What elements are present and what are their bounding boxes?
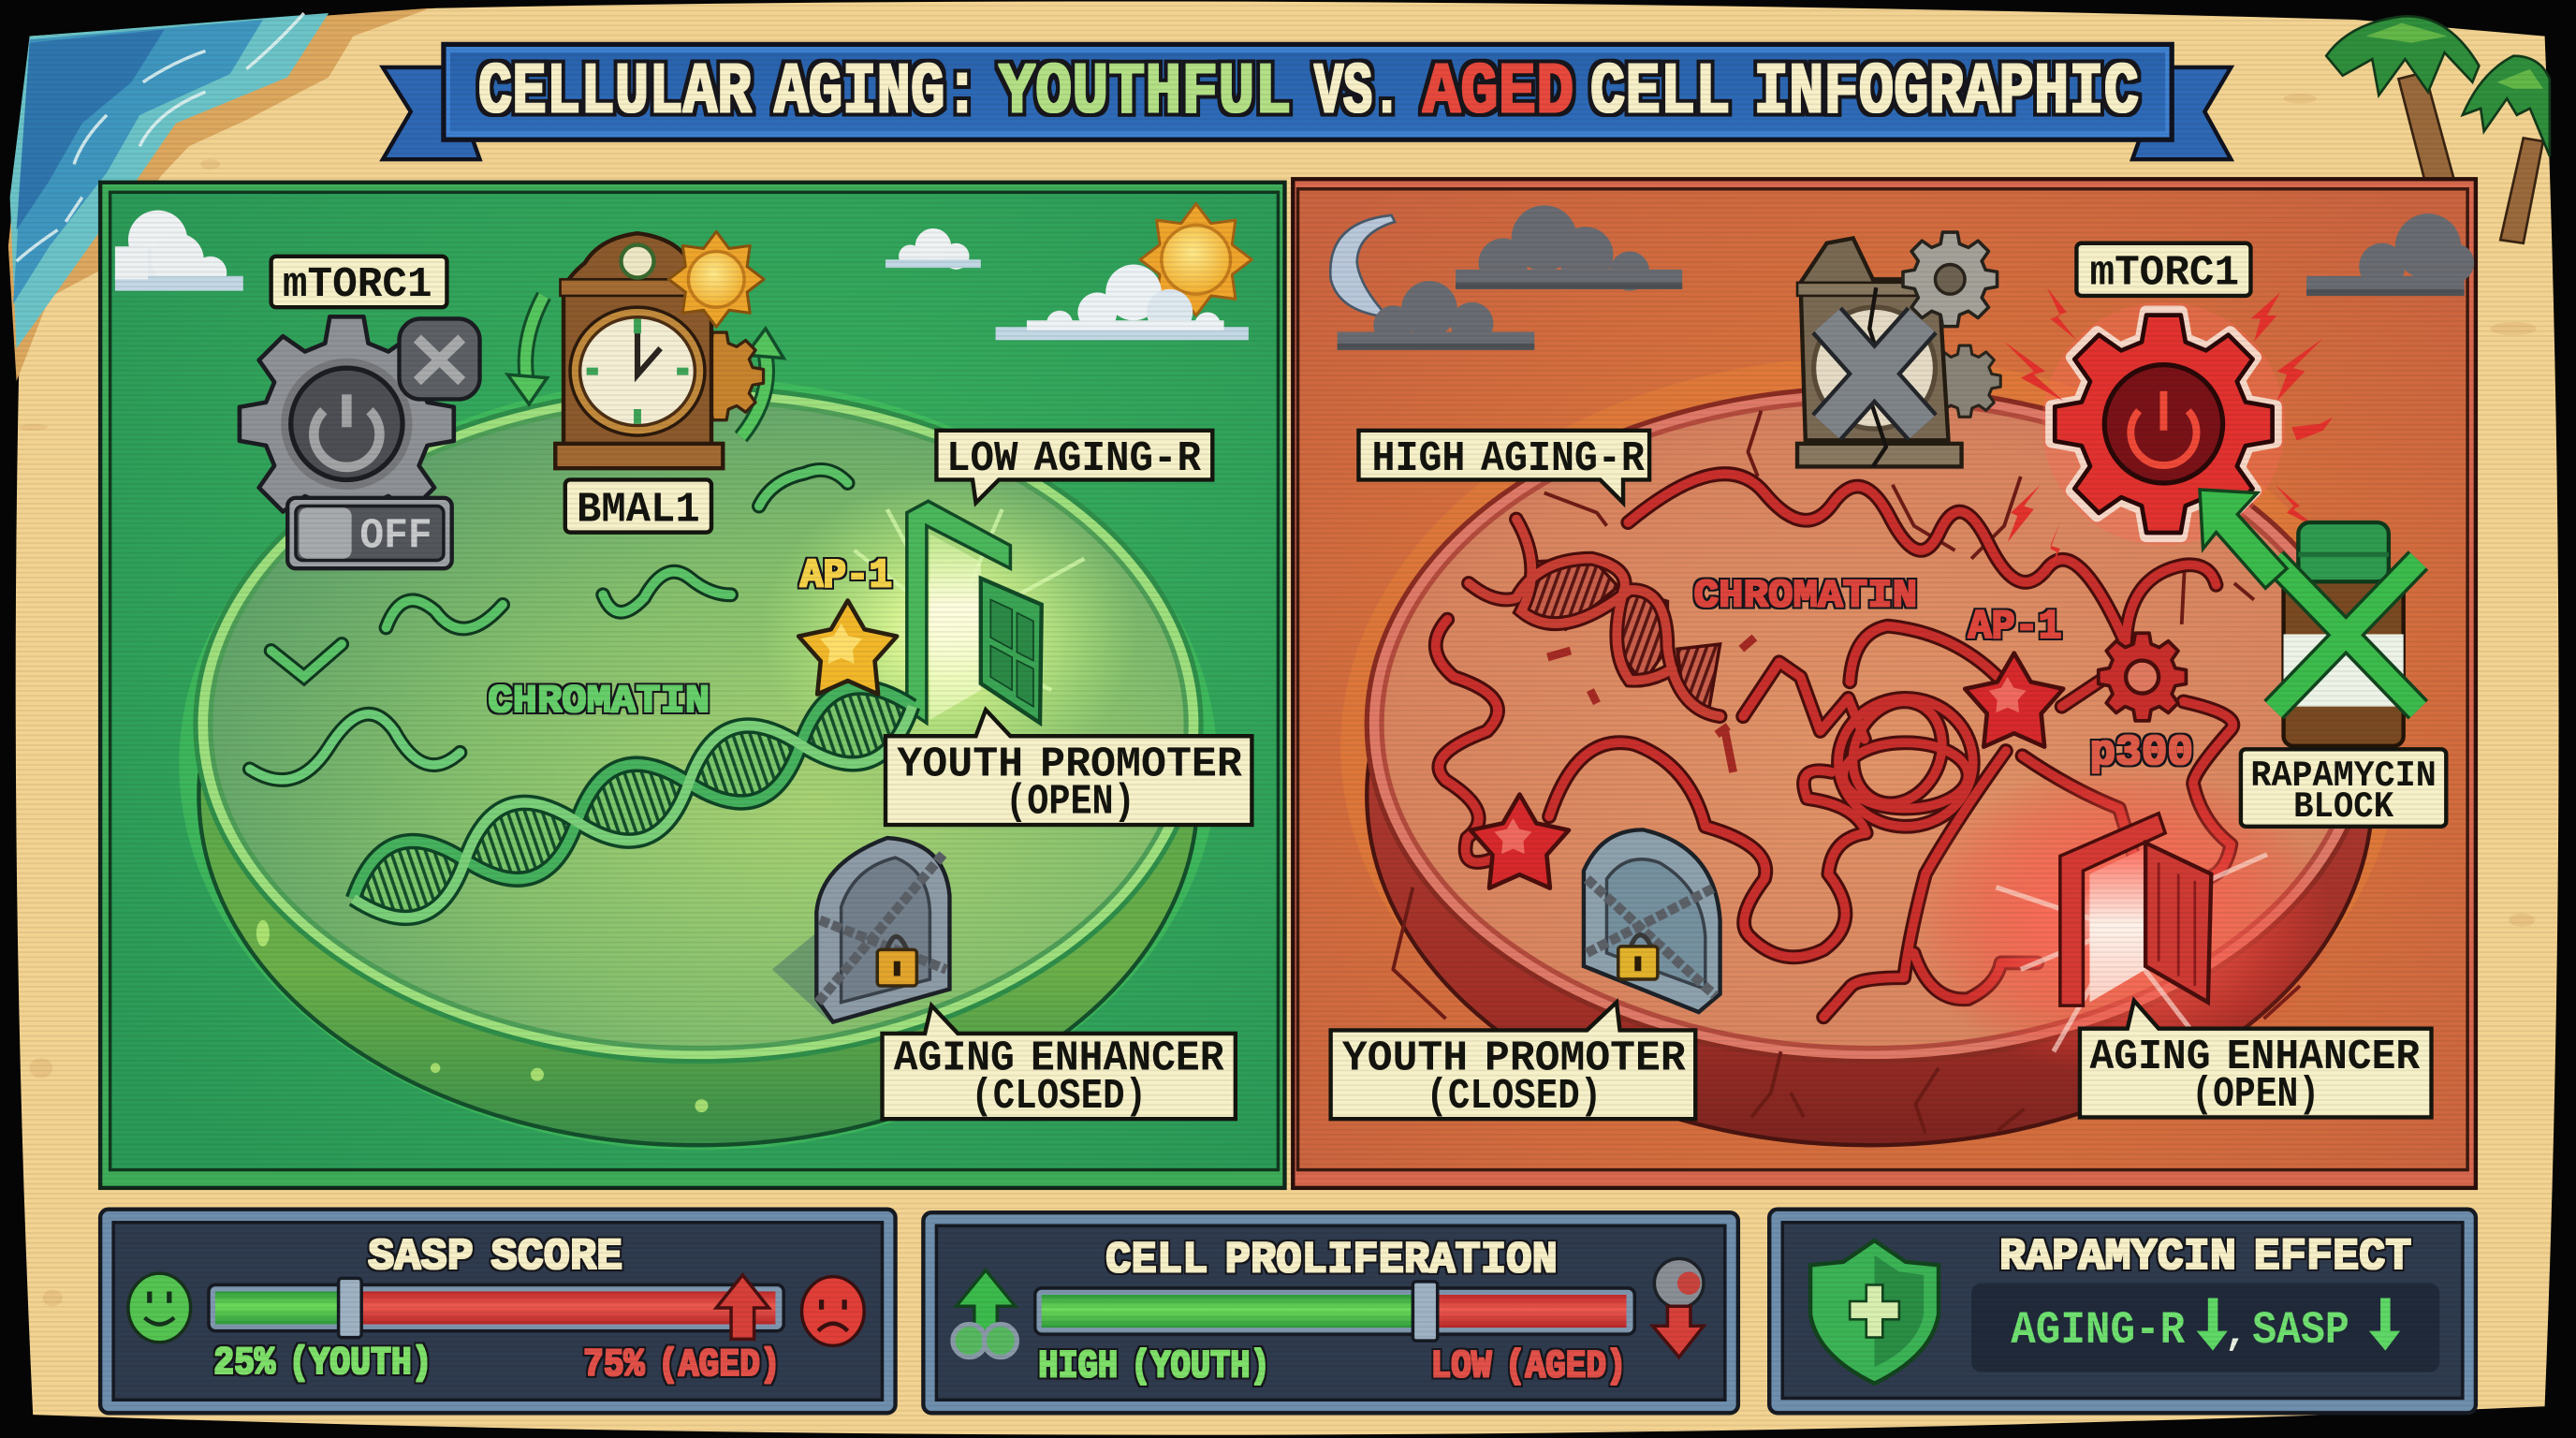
panel: rapamycin effect: [1769, 1210, 2476, 1413]
green inhibition arrow: [2200, 490, 2287, 588]
youth value: 25% (YOUTH): [213, 1341, 432, 1386]
label: rapamycin block: [2241, 749, 2446, 828]
red star AP-1: [1965, 653, 2063, 747]
ribbon tail right: [2132, 67, 2231, 159]
clock arrows: [507, 296, 783, 437]
X badge: [400, 318, 480, 399]
arrow down 1: [2197, 1298, 2228, 1351]
dish rim: [196, 388, 1201, 1062]
dish surface: [211, 401, 1186, 1049]
p300 gear: [2099, 633, 2186, 721]
clock: BMAL1: [555, 233, 764, 468]
AP-1 label: AP-1: [1969, 604, 2062, 651]
icon: smiley: [128, 1273, 191, 1343]
toggle off: [287, 498, 452, 568]
chromatin label: CHROMATIN: [1693, 574, 1917, 619]
label: mTORC1 on: mTORC1: [2089, 249, 2239, 298]
frame: [100, 1210, 896, 1413]
sun right: [1140, 204, 1251, 315]
title text vs: VS.: [1314, 52, 1401, 134]
label: low aging-r: LOW AGING-R: [946, 434, 1202, 483]
lightning bolts: [2004, 287, 2333, 579]
panel: cell proliferation: [923, 1212, 1738, 1413]
low label: LOW (AGED): [1431, 1344, 1627, 1389]
panel frame: [1293, 179, 2476, 1188]
broken gear: [1903, 232, 1998, 327]
panel: youthful cell: [100, 183, 1284, 1188]
chromatin squiggles: [250, 470, 848, 780]
gauge bar: [209, 1278, 783, 1338]
moon: [1330, 215, 1395, 317]
outer glow: [1340, 357, 2398, 1138]
label: aging enhancer closed: AGING ENHANCER: [894, 1034, 1224, 1083]
open door: youth promoter: [761, 477, 1138, 788]
open door: aging enhancer: [1906, 764, 2333, 1077]
dark cloud 3: [2306, 213, 2474, 296]
locked gate: youth promoter: [1584, 829, 1720, 1012]
label: aging enhancer open: AGING ENHANCER: [2089, 1033, 2421, 1081]
inner: [936, 1225, 1725, 1400]
label: youth promoter open: (OPEN): [1005, 778, 1135, 827]
title banner: [383, 44, 2231, 159]
label: high aging-r: [1358, 431, 1649, 503]
label: aging enhancer closed: (CLOSED): [971, 1072, 1147, 1121]
green X block: [2274, 560, 2418, 710]
chromatin label: CHROMATIN: [488, 679, 710, 724]
p300 label: p300: [2089, 728, 2193, 777]
panel frame: [100, 183, 1284, 1188]
label: youth promoter open: YOUTH PROMOTER: [897, 740, 1242, 788]
banner inner: [450, 52, 2165, 131]
tangled chromatin: [1436, 620, 2232, 1017]
red star lower: [1471, 795, 1569, 888]
inner: [1782, 1223, 2463, 1399]
label: aging enhancer open: (OPEN): [2191, 1070, 2320, 1119]
gray X: [1827, 320, 1922, 427]
toggle off: OFF: [359, 511, 432, 560]
broken DNA helix: [1469, 520, 1754, 772]
DNA helix: [341, 670, 925, 934]
aged value: 75% (AGED): [583, 1343, 781, 1387]
gear: mTORC1 off: [240, 316, 454, 531]
red arrow up: [716, 1275, 768, 1339]
cracks: [1393, 411, 2300, 1134]
banner plate: [444, 44, 2172, 139]
label: mTORC1 off: mTORC1: [283, 260, 432, 309]
gauge bar: [1035, 1282, 1634, 1341]
label: aging enhancer closed: [883, 1005, 1236, 1121]
icon: green arrow and cells: [953, 1270, 1017, 1357]
chromatin upper strand: [1628, 474, 2217, 644]
ribbon tail left: [383, 67, 480, 159]
dark cloud 1: [1456, 205, 1682, 291]
title text 2: CELL INFOGRAPHIC: [1590, 52, 2139, 134]
inner: [113, 1223, 883, 1400]
palm trees: [2326, 16, 2550, 243]
panel: aged cell: [1293, 179, 2476, 1188]
title text 1: CELLULAR AGING:: [478, 52, 979, 134]
high label: HIGH (YOUTH): [1038, 1344, 1270, 1389]
label: BMAL1: BMAL1: [577, 485, 700, 534]
frame: [923, 1212, 1738, 1413]
label: youth promoter closed: [1331, 1003, 1695, 1121]
title text aged: AGED: [1423, 52, 1573, 134]
broken clock: BMAL1 aged: [1797, 238, 2000, 466]
rapamycin bottle: [2284, 522, 2404, 746]
label: high aging-r: HIGH AGING-R: [1372, 434, 1645, 483]
gear: mTORC1 on: [2042, 302, 2285, 546]
dish rim: [1367, 388, 2372, 1062]
locked gate: aging enhancer: [772, 838, 949, 1022]
outer glow: [179, 378, 1218, 1151]
star AP-1: [798, 600, 897, 695]
label: youth promoter closed: YOUTH PROMOTER: [1342, 1034, 1686, 1083]
arrow down 2: [2369, 1298, 2400, 1351]
cloud right: [996, 265, 1249, 340]
cloud left: [115, 211, 243, 291]
cloud centre: [886, 228, 981, 270]
label: aging enhancer open: [2080, 1001, 2431, 1119]
label: rapamycin block: RAPAMYCIN: [2250, 756, 2437, 797]
heading: CELL PROLIFERATION: [1105, 1236, 1558, 1285]
result text sasp: SASP: [2252, 1304, 2349, 1357]
panel background: [1298, 189, 2467, 1170]
sun on clock: [668, 231, 764, 327]
heading: RAPAMYCIN EFFECT: [1999, 1233, 2411, 1283]
title text youthful: YOUTHFUL: [999, 52, 1292, 134]
icon: red cell and arrow: [1653, 1258, 1704, 1357]
petri dish: [179, 378, 1218, 1151]
label: rapamycin block: BLOCK: [2293, 786, 2394, 828]
cracked dish: [1340, 357, 2398, 1145]
dish base: [1367, 446, 2372, 1145]
dark cloud 2: [1338, 281, 1534, 350]
label: youth promoter open: [886, 710, 1251, 827]
panel: SASP score: [100, 1210, 896, 1413]
label: youth promoter closed: (CLOSED): [1426, 1072, 1602, 1121]
ocean and shore: [8, 8, 431, 381]
result box: [1971, 1284, 2439, 1372]
base sparkles: [256, 920, 708, 1112]
comma: ,: [2224, 1312, 2248, 1357]
result text: AGING-R: [2011, 1304, 2186, 1357]
dish surface: [1382, 401, 2358, 1049]
label: low aging-r: [936, 431, 1212, 503]
heading: SASP SCORE: [368, 1233, 622, 1283]
panel background: [110, 192, 1278, 1170]
AP-1 label: AP-1: [800, 553, 892, 600]
dish base: [198, 446, 1197, 1145]
icon: shield: [1810, 1240, 1939, 1384]
frame: [1769, 1210, 2476, 1413]
icon: sad face: [802, 1277, 864, 1345]
